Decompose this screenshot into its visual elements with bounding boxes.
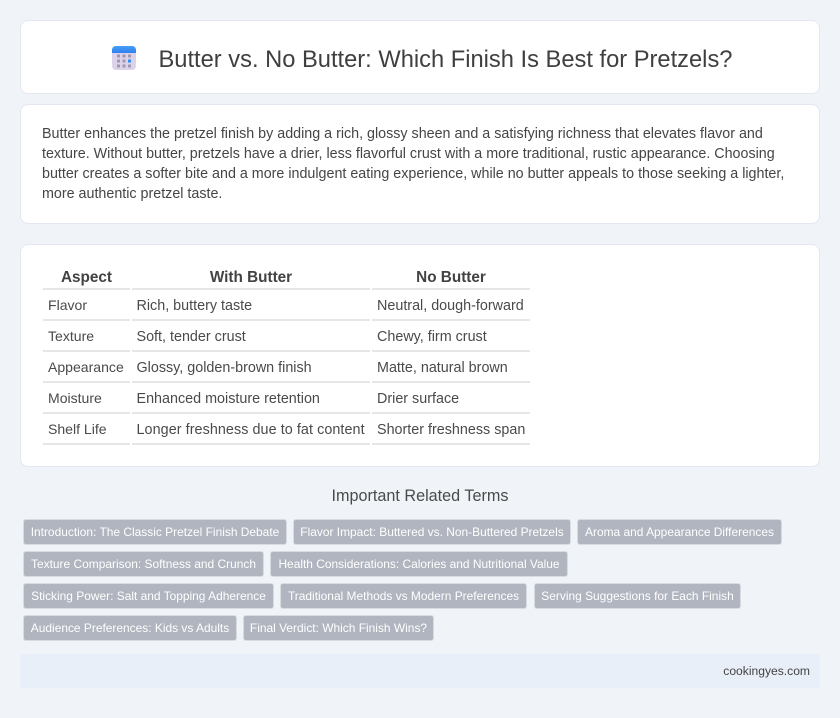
comparison table: Appearance <box>48 359 124 375</box>
comparison table: Chewy, firm crust <box>377 329 487 345</box>
comparison table: Shelf Life <box>48 421 107 437</box>
comparison table: With Butter <box>210 269 292 286</box>
comparison table: Drier surface <box>377 391 459 407</box>
panel: intro <box>20 104 820 224</box>
comparison table: Soft, tender crust <box>136 329 246 345</box>
title: Butter vs. No Butter: Which Finish Is Best for Pretzels? <box>158 47 732 73</box>
text block: intro paragraph <box>42 126 784 202</box>
related term tags: Aroma and Appearance Differences <box>585 525 774 539</box>
text block: intro paragraph: texture. Without butter, pretzels have a drier, less flavorful crust with a more traditional, rustic appearance. Choosing <box>42 146 775 162</box>
related term tags: Introduction: The Classic Pretzel Finish Debate <box>31 525 279 539</box>
comparison table: Shorter freshness span <box>377 422 525 438</box>
comparison table: Rich, buttery taste <box>136 298 252 314</box>
comparison table: No Butter <box>416 269 486 286</box>
text block: intro paragraph: more authentic pretzel taste. <box>42 186 222 202</box>
related term tags: Serving Suggestions for Each Finish <box>541 589 734 603</box>
comparison table: Flavor <box>48 297 87 313</box>
panel: comparison table <box>20 244 820 467</box>
comparison table: Texture <box>48 328 94 344</box>
related term tags: Final Verdict: Which Finish Wins? <box>250 621 427 635</box>
panel: title card <box>20 20 820 94</box>
related term tags: Flavor Impact: Buttered vs. Non-Buttered Pretzels <box>300 525 564 539</box>
comparison table: Aspect <box>61 269 112 286</box>
comparison table: Neutral, dough-forward <box>377 298 524 314</box>
comparison table: Matte, natural brown <box>377 360 508 376</box>
related term tags: Texture Comparison: Softness and Crunch <box>31 557 256 571</box>
related term tags <box>23 519 782 641</box>
comparison table: Longer freshness due to fat content <box>136 422 365 438</box>
text block: intro paragraph: Butter enhances the pretzel finish by adding a rich, glossy sheen and a satisfying richness that elevates flavor and <box>42 126 763 142</box>
footer source: cookingyes.com <box>723 664 810 678</box>
related term tags: Health Considerations: Calories and Nutritional Value <box>278 557 560 571</box>
comparison table: Moisture <box>48 390 102 406</box>
comparison table <box>43 269 530 445</box>
comparison table: Enhanced moisture retention <box>136 391 320 407</box>
related term tags: Traditional Methods vs Modern Preferences <box>288 589 519 603</box>
comparison table: Glossy, golden-brown finish <box>136 360 312 376</box>
footer bar <box>20 654 820 688</box>
related term tags: Sticking Power: Salt and Topping Adherence <box>31 589 266 603</box>
text block: intro paragraph: butter creates a softer bite and a more indulgent eating experience, while no butter appeals to those seeking a lighter, <box>42 166 784 182</box>
heading: related terms: Important Related Terms <box>332 487 508 505</box>
icon: calendar <box>112 46 136 70</box>
related term tags: Audience Preferences: Kids vs Adults <box>31 621 229 635</box>
